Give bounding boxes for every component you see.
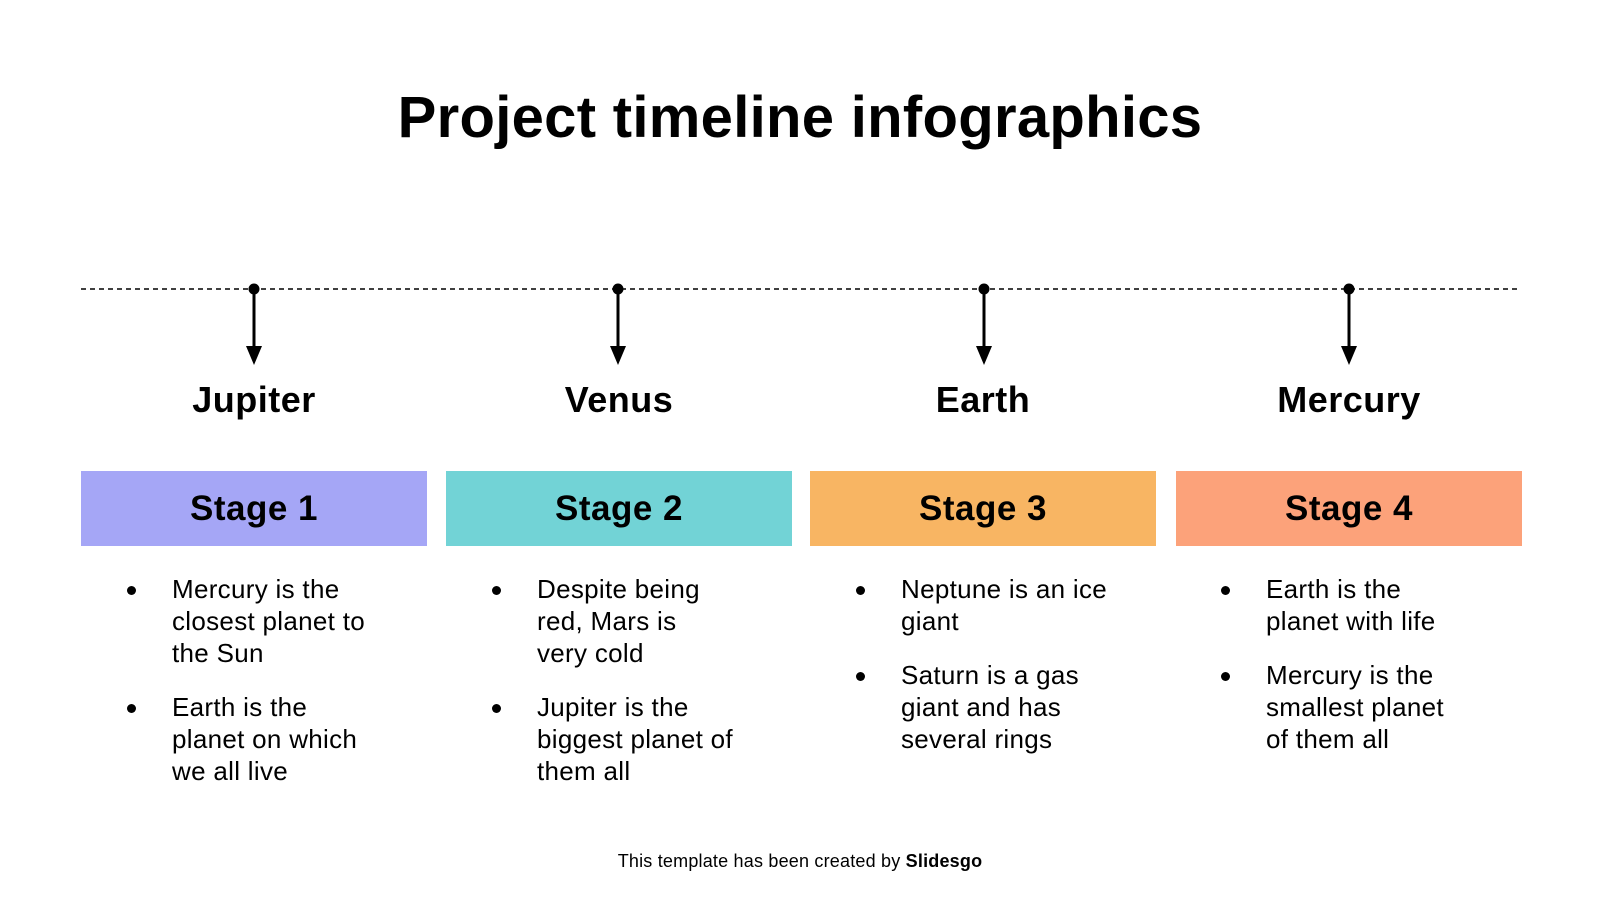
stage 1 list: Mercury is the <box>172 574 339 604</box>
stage 2 list: Jupiter is the <box>537 692 689 722</box>
label: Venus: Venus <box>565 379 673 420</box>
stage 3 box: Stage 3 <box>919 488 1047 528</box>
stage 4 list: planet with life <box>1266 606 1436 636</box>
stage 3 box <box>810 471 1156 546</box>
stage 2 list <box>492 574 733 786</box>
stage 3 list: several rings <box>901 724 1052 754</box>
stage 2 box: Stage 2 <box>555 488 683 528</box>
stage 1 list: the Sun <box>172 638 264 668</box>
stage 1 list <box>127 574 365 786</box>
stage 1 list: closest planet to <box>172 606 365 636</box>
timeline with arrows <box>81 284 1517 365</box>
stage 1 box: Stage 1 <box>190 488 318 528</box>
label: Jupiter: Jupiter <box>192 379 316 420</box>
stage 3 list: Neptune is an ice <box>901 574 1107 604</box>
stage 4 list <box>1221 574 1444 754</box>
stage 4 box <box>1176 471 1522 546</box>
stage 3 list: Saturn is a gas <box>901 660 1079 690</box>
stage 3 list: giant and has <box>901 692 1061 722</box>
stage 2 list: biggest planet of <box>537 724 733 754</box>
stage 1 box <box>81 471 427 546</box>
stage 4 box: Stage 4 <box>1285 488 1413 528</box>
label: Mercury: Mercury <box>1277 379 1421 420</box>
footer: This template has been created by Slidesgo <box>618 851 982 871</box>
stage 1 list: we all live <box>172 756 288 786</box>
stage 2 list: them all <box>537 756 630 786</box>
stage 4 list: smallest planet <box>1266 692 1444 722</box>
stage 2 list: very cold <box>537 638 644 668</box>
stage 3 list <box>856 574 1107 754</box>
stage 4 list: Mercury is the <box>1266 660 1433 690</box>
stage 4 list: of them all <box>1266 724 1389 754</box>
stage 3 list: giant <box>901 606 959 636</box>
stage 1 list: Earth is the <box>172 692 307 722</box>
stage 4 list: Earth is the <box>1266 574 1401 604</box>
stage 1 list: planet on which <box>172 724 357 754</box>
stage 2 list: red, Mars is <box>537 606 676 636</box>
title: Project timeline infographics <box>398 85 1202 150</box>
label: Earth: Earth <box>936 379 1030 420</box>
stage 2 list: Despite being <box>537 574 700 604</box>
stage 2 box <box>446 471 792 546</box>
